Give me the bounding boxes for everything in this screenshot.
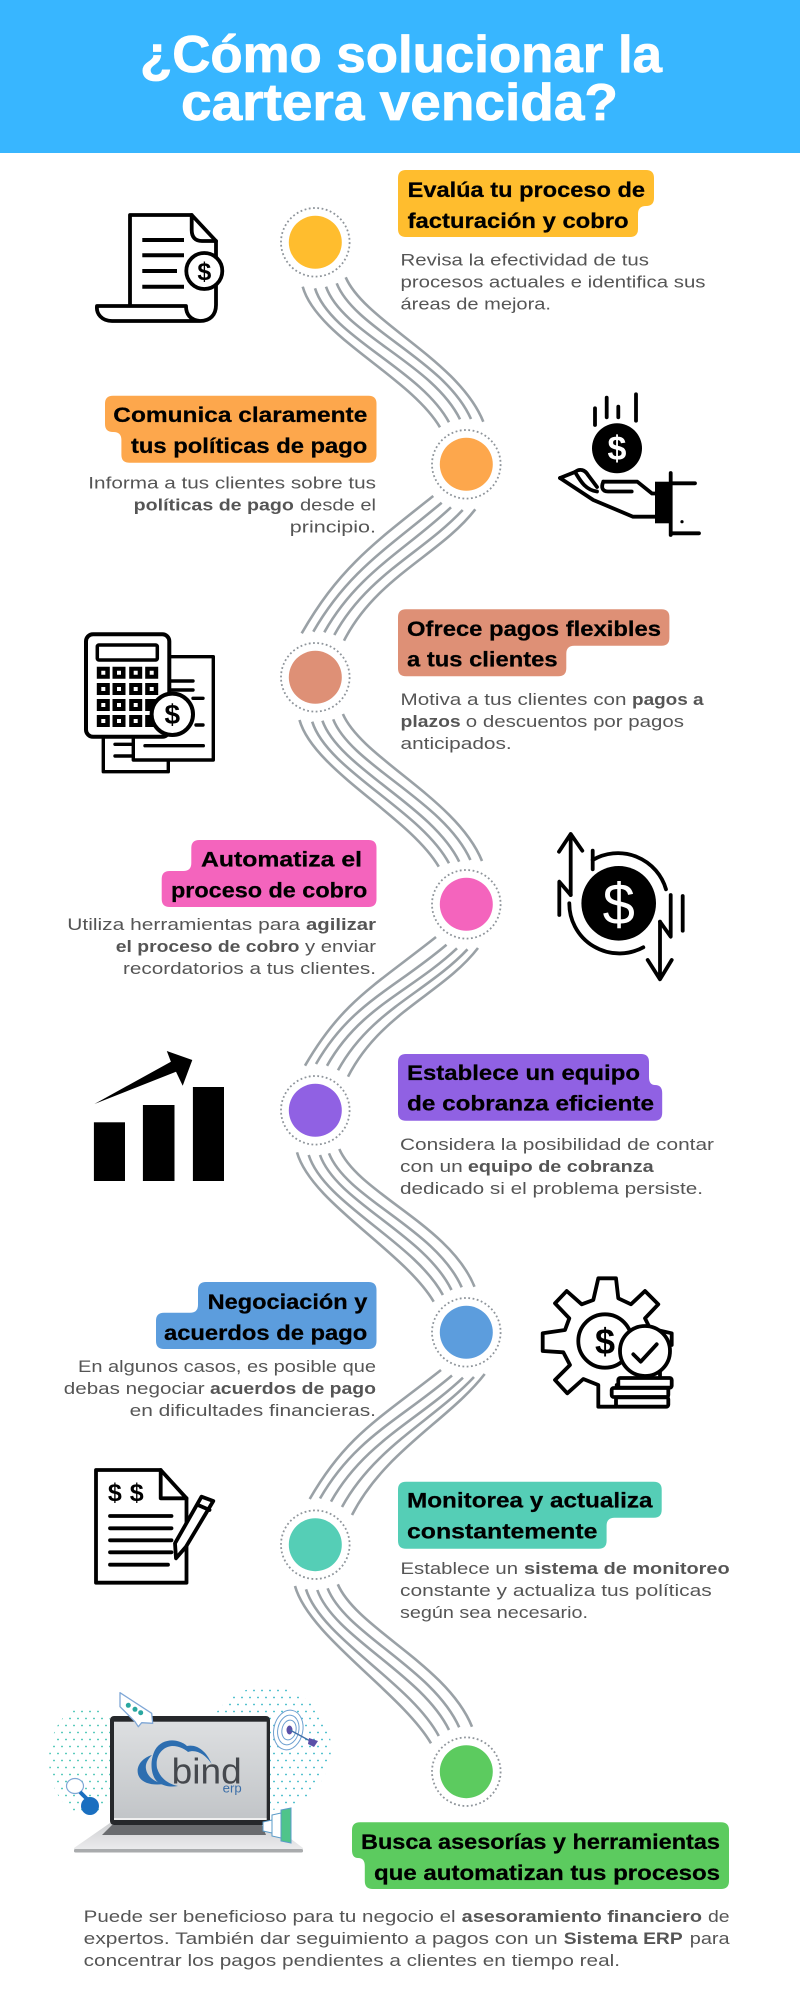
icon: invoice with dollar coin	[97, 215, 222, 321]
text block: Puede ser beneficioso para tu negocio el	[84, 1907, 456, 1926]
heading	[352, 1822, 729, 1889]
icon: hourglass	[66, 1778, 99, 1815]
text block: Utiliza herramientas para	[67, 915, 301, 934]
text block: Considera la posibilidad de contar	[400, 1135, 715, 1154]
heading: tus políticas de pago	[131, 434, 367, 458]
header banner	[0, 0, 800, 153]
logo: Bind ERP	[138, 1740, 242, 1796]
heading: de cobranza eficiente	[407, 1092, 654, 1116]
text block: Informa a tus clientes sobre tus	[88, 474, 376, 493]
heading: proceso de cobro	[171, 879, 367, 903]
text block: recordatorios a tus clientes.	[123, 959, 376, 978]
text block: Revisa la efectividad de tus	[400, 251, 649, 270]
text block: Motiva a tus clientes con	[400, 690, 626, 709]
panel: step 4	[67, 834, 683, 979]
connector: step 3 to 4	[300, 714, 482, 867]
text block	[64, 1357, 376, 1420]
heading: facturación y cobro	[408, 209, 629, 233]
text block: agilizar	[306, 915, 377, 934]
heading: Comunica claramente	[113, 403, 367, 427]
icon: invoice with dollar coin: $	[197, 258, 211, 286]
marker	[432, 1737, 501, 1806]
heading	[398, 1054, 662, 1121]
heading	[398, 609, 669, 676]
text block: desde el	[300, 496, 376, 515]
text block: procesos actuales e identifica sus	[400, 273, 706, 292]
panel: step 6	[64, 1278, 672, 1420]
marker	[281, 1510, 350, 1579]
text block	[400, 1559, 730, 1622]
text block: En algunos casos, es posible que	[78, 1357, 376, 1376]
text block: acuerdos de pago	[210, 1379, 376, 1398]
text block	[84, 1907, 730, 1970]
text block: principio.	[290, 518, 376, 537]
icon: hand receiving dollar coin	[560, 394, 699, 535]
icon: document and pencil: $	[130, 1479, 144, 1507]
text block: equipo de cobranza	[468, 1157, 654, 1176]
panel: step 8	[49, 1686, 730, 1970]
text block	[400, 1135, 715, 1198]
text block: Establece un	[400, 1559, 518, 1578]
text block: dedicado si el problema persiste.	[400, 1179, 703, 1198]
text block: en dificultades financieras.	[130, 1401, 376, 1420]
icon: document and pencil: $	[108, 1479, 122, 1507]
text block: o descuentos por pagos	[466, 712, 684, 731]
icon: dollar coin with circulating arrows: $	[603, 872, 635, 937]
icon: rising bar chart with arrow	[94, 1051, 224, 1181]
connector: step 4 to 5	[305, 937, 478, 1077]
text block: y enviar	[305, 937, 377, 956]
text block: constante y actualiza tus políticas	[400, 1581, 712, 1600]
icon: bars	[263, 1808, 291, 1843]
text block	[88, 474, 376, 537]
heading	[398, 1482, 662, 1549]
heading: Busca asesorías y herramientas	[361, 1830, 720, 1854]
icon: document and pencil	[96, 1470, 213, 1583]
keypad	[97, 667, 158, 727]
connector: step 5 to 6	[297, 1149, 474, 1302]
heading: a tus clientes	[407, 648, 558, 672]
heading: que automatizan tus procesos	[374, 1861, 720, 1885]
heading: Ofrece pagos flexibles	[407, 617, 661, 641]
icon: gear with coins and check	[543, 1278, 672, 1407]
heading	[156, 1282, 376, 1349]
heading	[105, 396, 376, 463]
heading	[162, 840, 376, 907]
panel: step 3	[86, 609, 704, 772]
connector: step 7 to 8	[295, 1584, 472, 1743]
heading: Automatiza el	[201, 848, 362, 872]
connector: step 1 to 2	[303, 277, 483, 427]
text block: el proceso de cobro	[116, 937, 300, 956]
text block: para	[690, 1929, 730, 1948]
icon: calculator and documents: $	[165, 699, 181, 730]
heading: Negociación y	[208, 1290, 367, 1314]
text block: expertos. También dar seguimiento a pagos con un	[84, 1929, 558, 1948]
heading: acuerdos de pago	[164, 1321, 367, 1345]
panel: step 7	[96, 1470, 730, 1622]
panel: step 1	[97, 170, 706, 321]
connector: step 2 to 3	[302, 496, 475, 641]
connector: step 6 to 7	[310, 1370, 485, 1515]
text block: anticipados.	[400, 734, 512, 753]
text block: asesoramiento financiero	[462, 1907, 702, 1926]
text block	[67, 915, 377, 978]
marker	[281, 208, 350, 277]
marker	[281, 643, 350, 712]
title: ¿Cómo solucionar la	[140, 26, 663, 84]
text block	[400, 251, 706, 314]
title: cartera vencida?	[181, 74, 618, 132]
icon: target with dart	[270, 1707, 318, 1753]
panel: step 2	[88, 394, 699, 537]
panel: step 5	[94, 1051, 715, 1198]
heading: Establece un equipo	[407, 1061, 640, 1085]
dotted background	[49, 1686, 331, 1814]
text block: áreas de mejora.	[400, 295, 551, 314]
heading: constantemente	[407, 1520, 597, 1544]
heading: Monitorea y actualiza	[407, 1489, 654, 1513]
icon: hand receiving dollar coin: $	[608, 430, 627, 468]
text block: debas negociar	[64, 1379, 205, 1398]
text block: sistema de monitoreo	[524, 1559, 730, 1578]
logo: Bind ERP: erp	[223, 1780, 242, 1796]
title	[140, 26, 663, 132]
marker	[432, 430, 501, 499]
marker	[432, 870, 501, 939]
text block: concentrar los pagos pendientes a clientes en tiempo real.	[84, 1951, 620, 1970]
text block: políticas de pago	[134, 496, 294, 515]
icon: dollar coin with circulating arrows	[559, 834, 683, 979]
text block	[400, 690, 704, 753]
logo: Bind ERP: bind	[172, 1750, 242, 1791]
text block: de	[708, 1907, 730, 1926]
laptop	[74, 1716, 303, 1852]
heading: Evalúa tu proceso de	[408, 178, 645, 202]
icon: calculator and documents	[86, 634, 213, 772]
text block: plazos	[400, 712, 461, 731]
text block: según sea necesario.	[400, 1603, 588, 1622]
marker	[432, 1298, 501, 1367]
text block: con un	[400, 1157, 463, 1176]
heading	[398, 170, 654, 237]
icon: speech bubble	[120, 1693, 153, 1727]
marker	[281, 1076, 350, 1145]
icon: gear with coins and check: $	[595, 1321, 615, 1362]
text block: Sistema ERP	[564, 1929, 683, 1948]
illustration: laptop with Bind ERP	[49, 1686, 331, 1852]
text block: pagos a	[632, 690, 704, 709]
